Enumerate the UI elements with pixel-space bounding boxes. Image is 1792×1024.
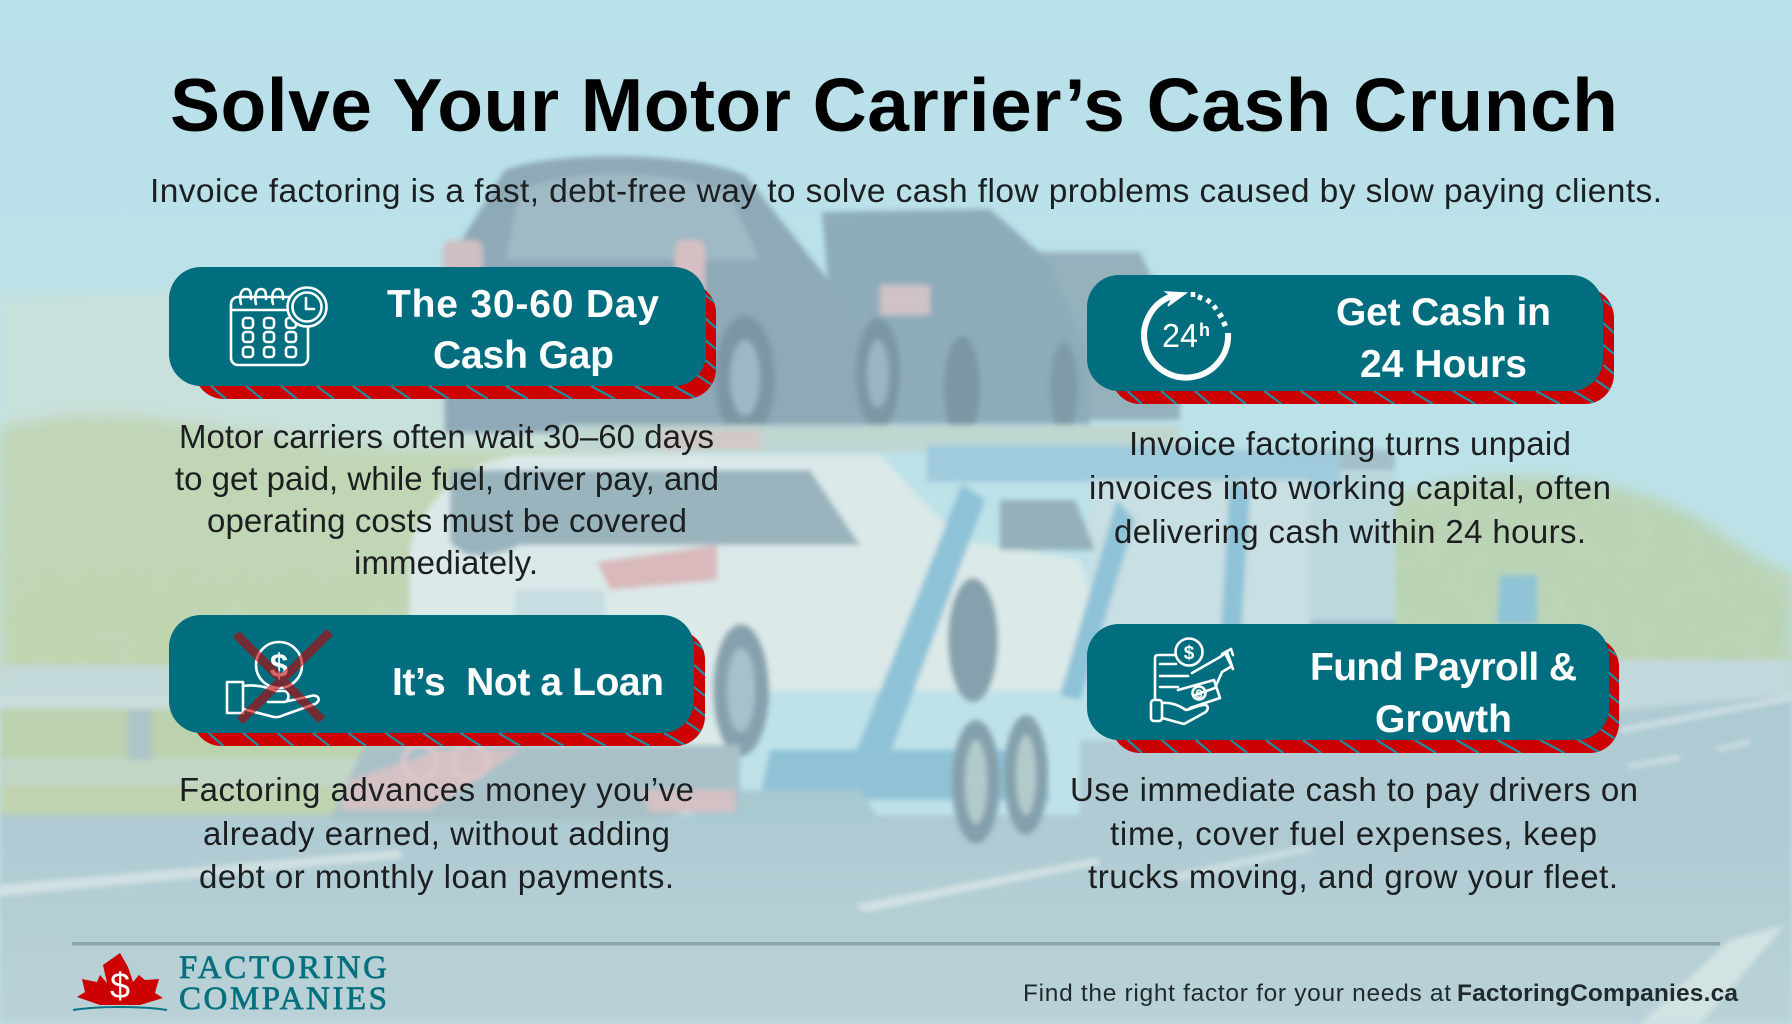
heading: The 30-60 Day Cash Gap [387,283,659,377]
footer text [1023,980,1738,1007]
heading: Get Cash in 24 Hours: 24 Hours [1360,343,1527,386]
text block: get cash in 24 hours [1089,425,1611,550]
heading: Get Cash in 24 Hours [1336,291,1551,386]
logo: Factoring Companies: COMPANIES [179,981,387,1017]
title: Solve Your Motor Carrier’s Cash Crunch [170,63,1618,147]
logo: Factoring Companies: FACTORING [179,950,387,986]
footer text: Find the right factor for your needs at [1023,980,1451,1007]
panel: Get Cash in 24 Hours banner [1087,275,1614,404]
text block: not a loan: debt or monthly loan payments. [199,858,674,895]
icon: 24 hour clock [1144,292,1228,378]
frame [845,484,985,780]
text block: 30-60 day gap: immediately. [354,544,538,581]
text block: fund payroll: Use immediate cash to pay drivers on [1070,771,1638,808]
heading: Fund Payroll & Growth: Growth [1375,698,1512,741]
panel: It's Not a Loan banner [169,615,705,746]
text block: fund payroll [1070,771,1638,895]
icon: payroll document with cash in hands: $ [1196,687,1203,701]
text block: not a loan [179,771,694,895]
rear plate and lights [330,745,740,820]
deck [560,425,1180,452]
icon: maple leaf with dollar [73,953,167,1010]
lower cars [408,455,1110,745]
text block: 30-60 day gap: to get paid, while fuel, driver pay, and [175,460,719,497]
logo: Factoring Companies [73,950,387,1017]
upper cars [1012,252,1180,420]
text block: get cash in 24 hours: invoices into working capital, often [1089,469,1611,506]
icon: hand with coin crossed out: $ [270,647,288,684]
panel: Fund Payroll & Growth banner [1087,624,1619,753]
icon: 24 hour clock: h [1199,320,1210,340]
icon: payroll document with cash in hands: $ [1184,643,1195,664]
heading: Get Cash in 24 Hours: Get Cash in [1336,291,1551,334]
heading: The 30-60 Day Cash Gap: Cash Gap [433,334,614,377]
icon: 24 hour clock: 24 [1162,317,1198,354]
footer text: FactoringCompanies.ca [1457,980,1738,1007]
text block: not a loan: already earned, without adding [203,815,670,852]
subtitle: Invoice factoring is a fast, debt-free way to solve cash flow problems caused by slow paying clients. [150,173,1662,210]
icon: hand with coin crossed out [227,632,330,721]
heading: Fund Payroll & Growth: Fund Payroll & [1310,646,1577,689]
icon: calendar with clock [231,288,326,365]
heading: It's Not a Loan: It’s Not a Loan [392,661,664,704]
text block: fund payroll: time, cover fuel expenses, keep [1110,815,1597,852]
truck cab [1200,450,1395,640]
text block: get cash in 24 hours: Invoice factoring turns unpaid [1129,425,1571,462]
heading: Fund Payroll & Growth [1310,646,1577,741]
icon: payroll document with cash in hands [1151,638,1233,724]
text block: get cash in 24 hours: delivering cash within 24 hours. [1114,513,1586,550]
heading: The 30-60 Day Cash Gap: The 30-60 Day [387,283,659,326]
panel: The 30-60 Day Cash Gap banner [169,267,716,399]
icon: maple leaf with dollar: $ [110,965,130,1006]
text block: not a loan: Factoring advances money you’ve [179,771,694,808]
text block: 30-60 day gap [175,418,719,581]
text block: fund payroll: trucks moving, and grow your fleet. [1088,858,1618,895]
text block: 30-60 day gap: Motor carriers often wait 30–60 days [179,418,714,455]
text block: 30-60 day gap: operating costs must be covered [207,502,687,539]
